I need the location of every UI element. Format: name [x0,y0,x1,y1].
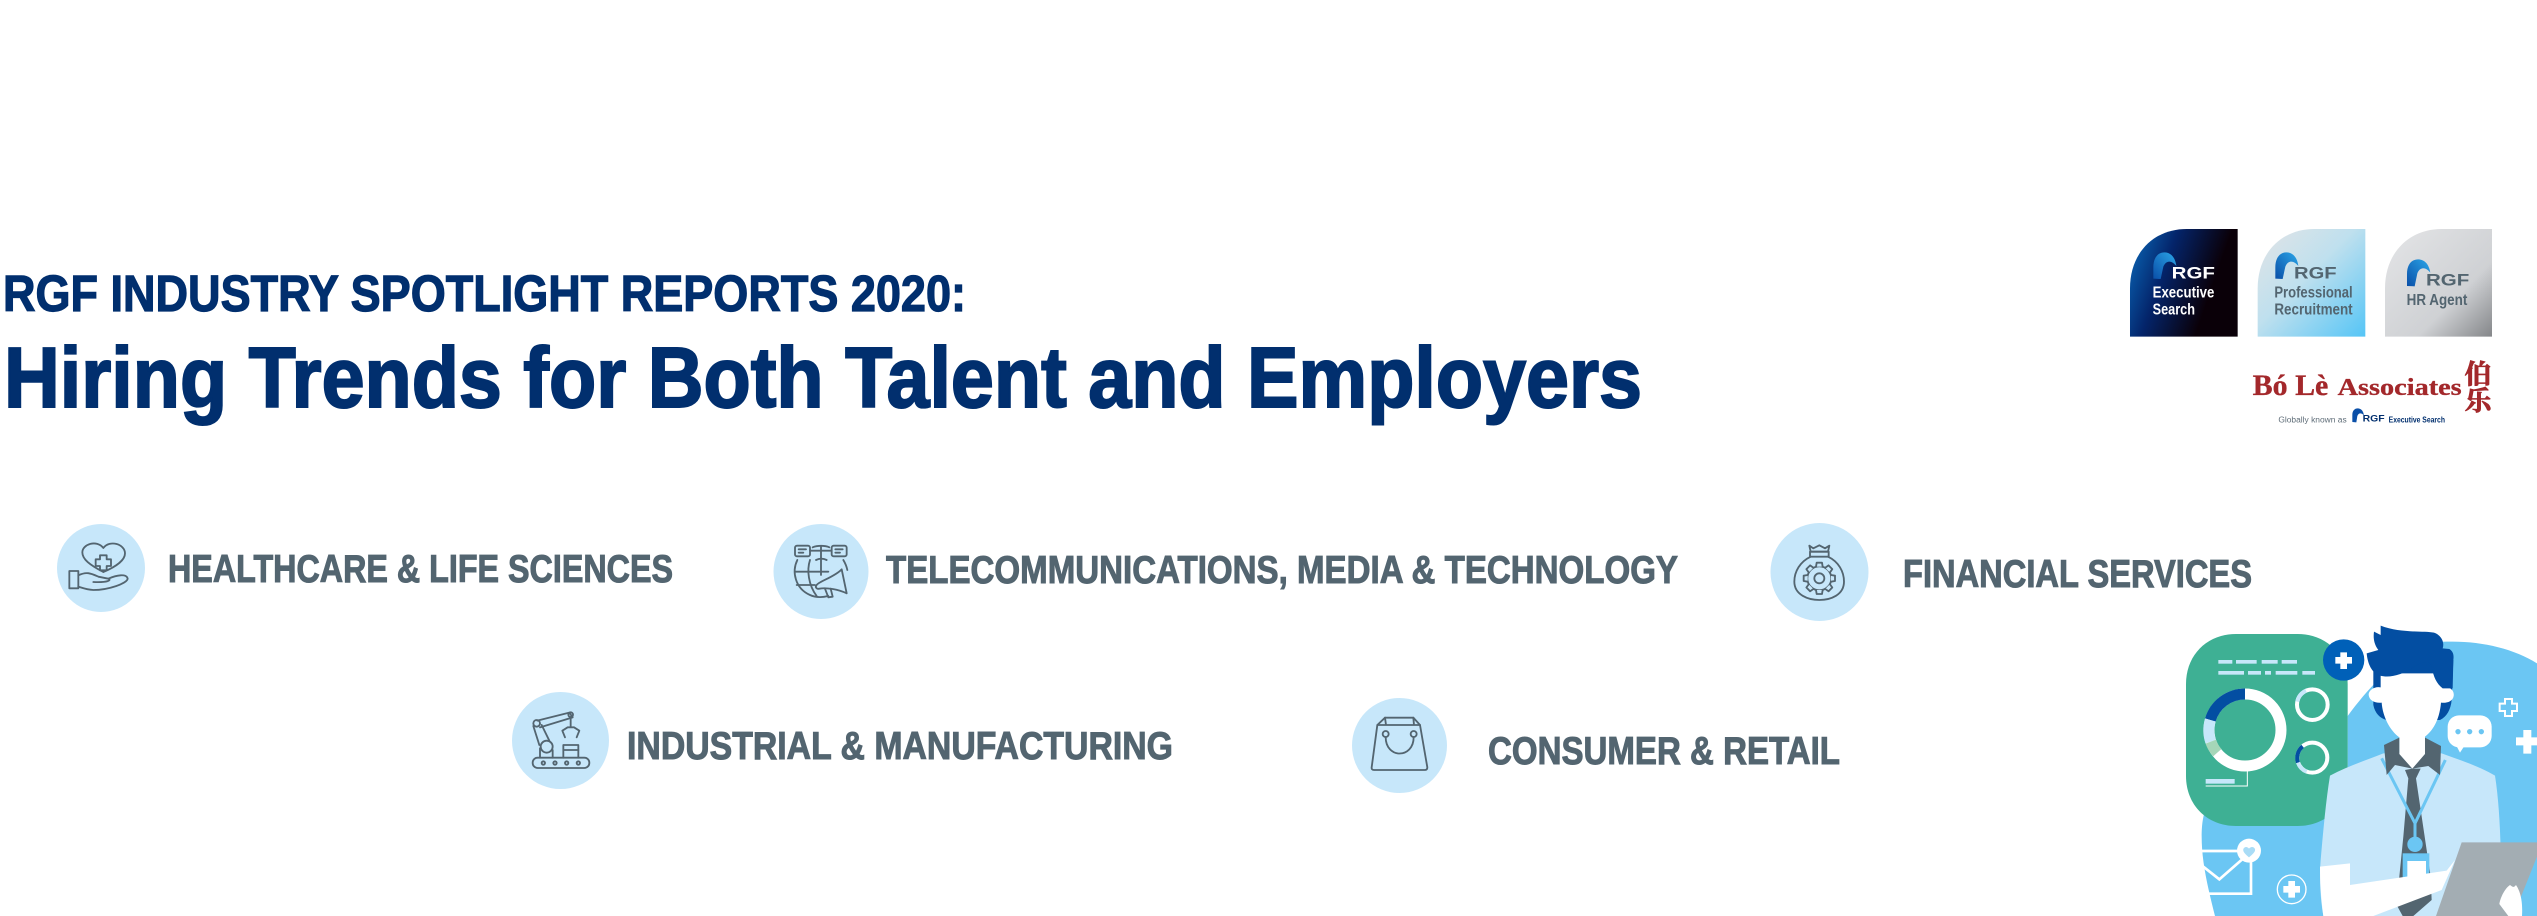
logo: Bo Le Associates: Globally known as [2278,415,2347,424]
label: CONSUMER & RETAIL [1488,730,1840,773]
hair fringe [2367,626,2454,688]
icon: heart in hand [57,524,145,612]
badge: RGF Professional Recruitment: RGF [2294,263,2337,282]
logo: Bo Le Associates: 伯 [2465,352,2491,391]
label: TELECOMMUNICATIONS, MEDIA & TECHNOLOGY [886,549,1678,592]
badge: RGF HR Agent: HR Agent [2407,292,2467,309]
badge: RGF HR Agent [2385,229,2492,337]
icon: globe and megaphone [774,524,868,619]
illustration: professional with dashboard [2186,626,2537,916]
logo: Bo Le Associates: RGF [2363,414,2385,424]
sleeve [2320,860,2455,916]
icon: plus badge [2323,639,2364,681]
category: healthcare and life sciences [57,524,673,612]
icon: solid cross [2516,730,2537,754]
panel: green dashboard [2186,634,2348,826]
icon: speech bubble [2448,715,2492,753]
title: Hiring Trends for Both Talent and Employers [4,331,1642,426]
icon: plus in circle [2277,875,2306,904]
logo: Bo Le Associates: Associates [2338,375,2462,401]
background blob [2202,642,2537,916]
id badge [2407,837,2423,852]
label: HEALTHCARE & LIFE SCIENCES [168,548,673,591]
category: consumer and retail [1352,698,1840,793]
small ring charts [2297,689,2328,773]
category: financial services [1770,523,2252,621]
badge: RGF Executive Search [2130,229,2238,337]
badge: RGF Executive Search: RGF [2172,263,2215,282]
logo: Bo Le Associates: Executive Search [2389,415,2445,424]
logo: Bo Le Associates: Bó Lè [2253,370,2328,402]
person [2320,626,2537,916]
category: industrial and manufacturing [512,692,1173,789]
icon: outline cross [2500,699,2517,716]
icon: robot arm on conveyor [512,692,609,789]
badge: RGF Professional Recruitment [2258,229,2365,337]
lanyard [2382,758,2445,840]
badge: RGF HR Agent: RGF [2426,270,2469,289]
badge: RGF Professional Recruitment: Recruitment [2274,301,2353,318]
icon: money bag with gear [1770,523,1868,621]
badge: RGF Executive Search: Executive [2153,284,2214,301]
label: FINANCIAL SERVICES [1903,553,2252,596]
subtitle: RGF INDUSTRY SPOTLIGHT REPORTS 2020: [3,265,966,322]
jacket [2320,753,2503,916]
face and neck [2369,673,2454,769]
logos [2130,229,2494,424]
icon: envelope with heart [2202,839,2261,894]
logo: Bo Le Associates: 乐 [2465,379,2494,418]
badge: RGF Executive Search: Search [2153,301,2195,318]
tie [2397,769,2432,916]
hair back [2373,650,2453,720]
hand [2499,885,2522,916]
category: telecommunications, media and technology [774,524,1678,619]
label: INDUSTRIAL & MANUFACTURING [627,725,1173,768]
badge: RGF Professional Recruitment: Professional [2274,284,2353,301]
donut chart [2209,694,2281,766]
logo: Bo Le Associates [2253,352,2494,424]
collar [2384,738,2441,775]
tablet [2436,842,2537,916]
icon: shopping bag [1352,698,1447,793]
